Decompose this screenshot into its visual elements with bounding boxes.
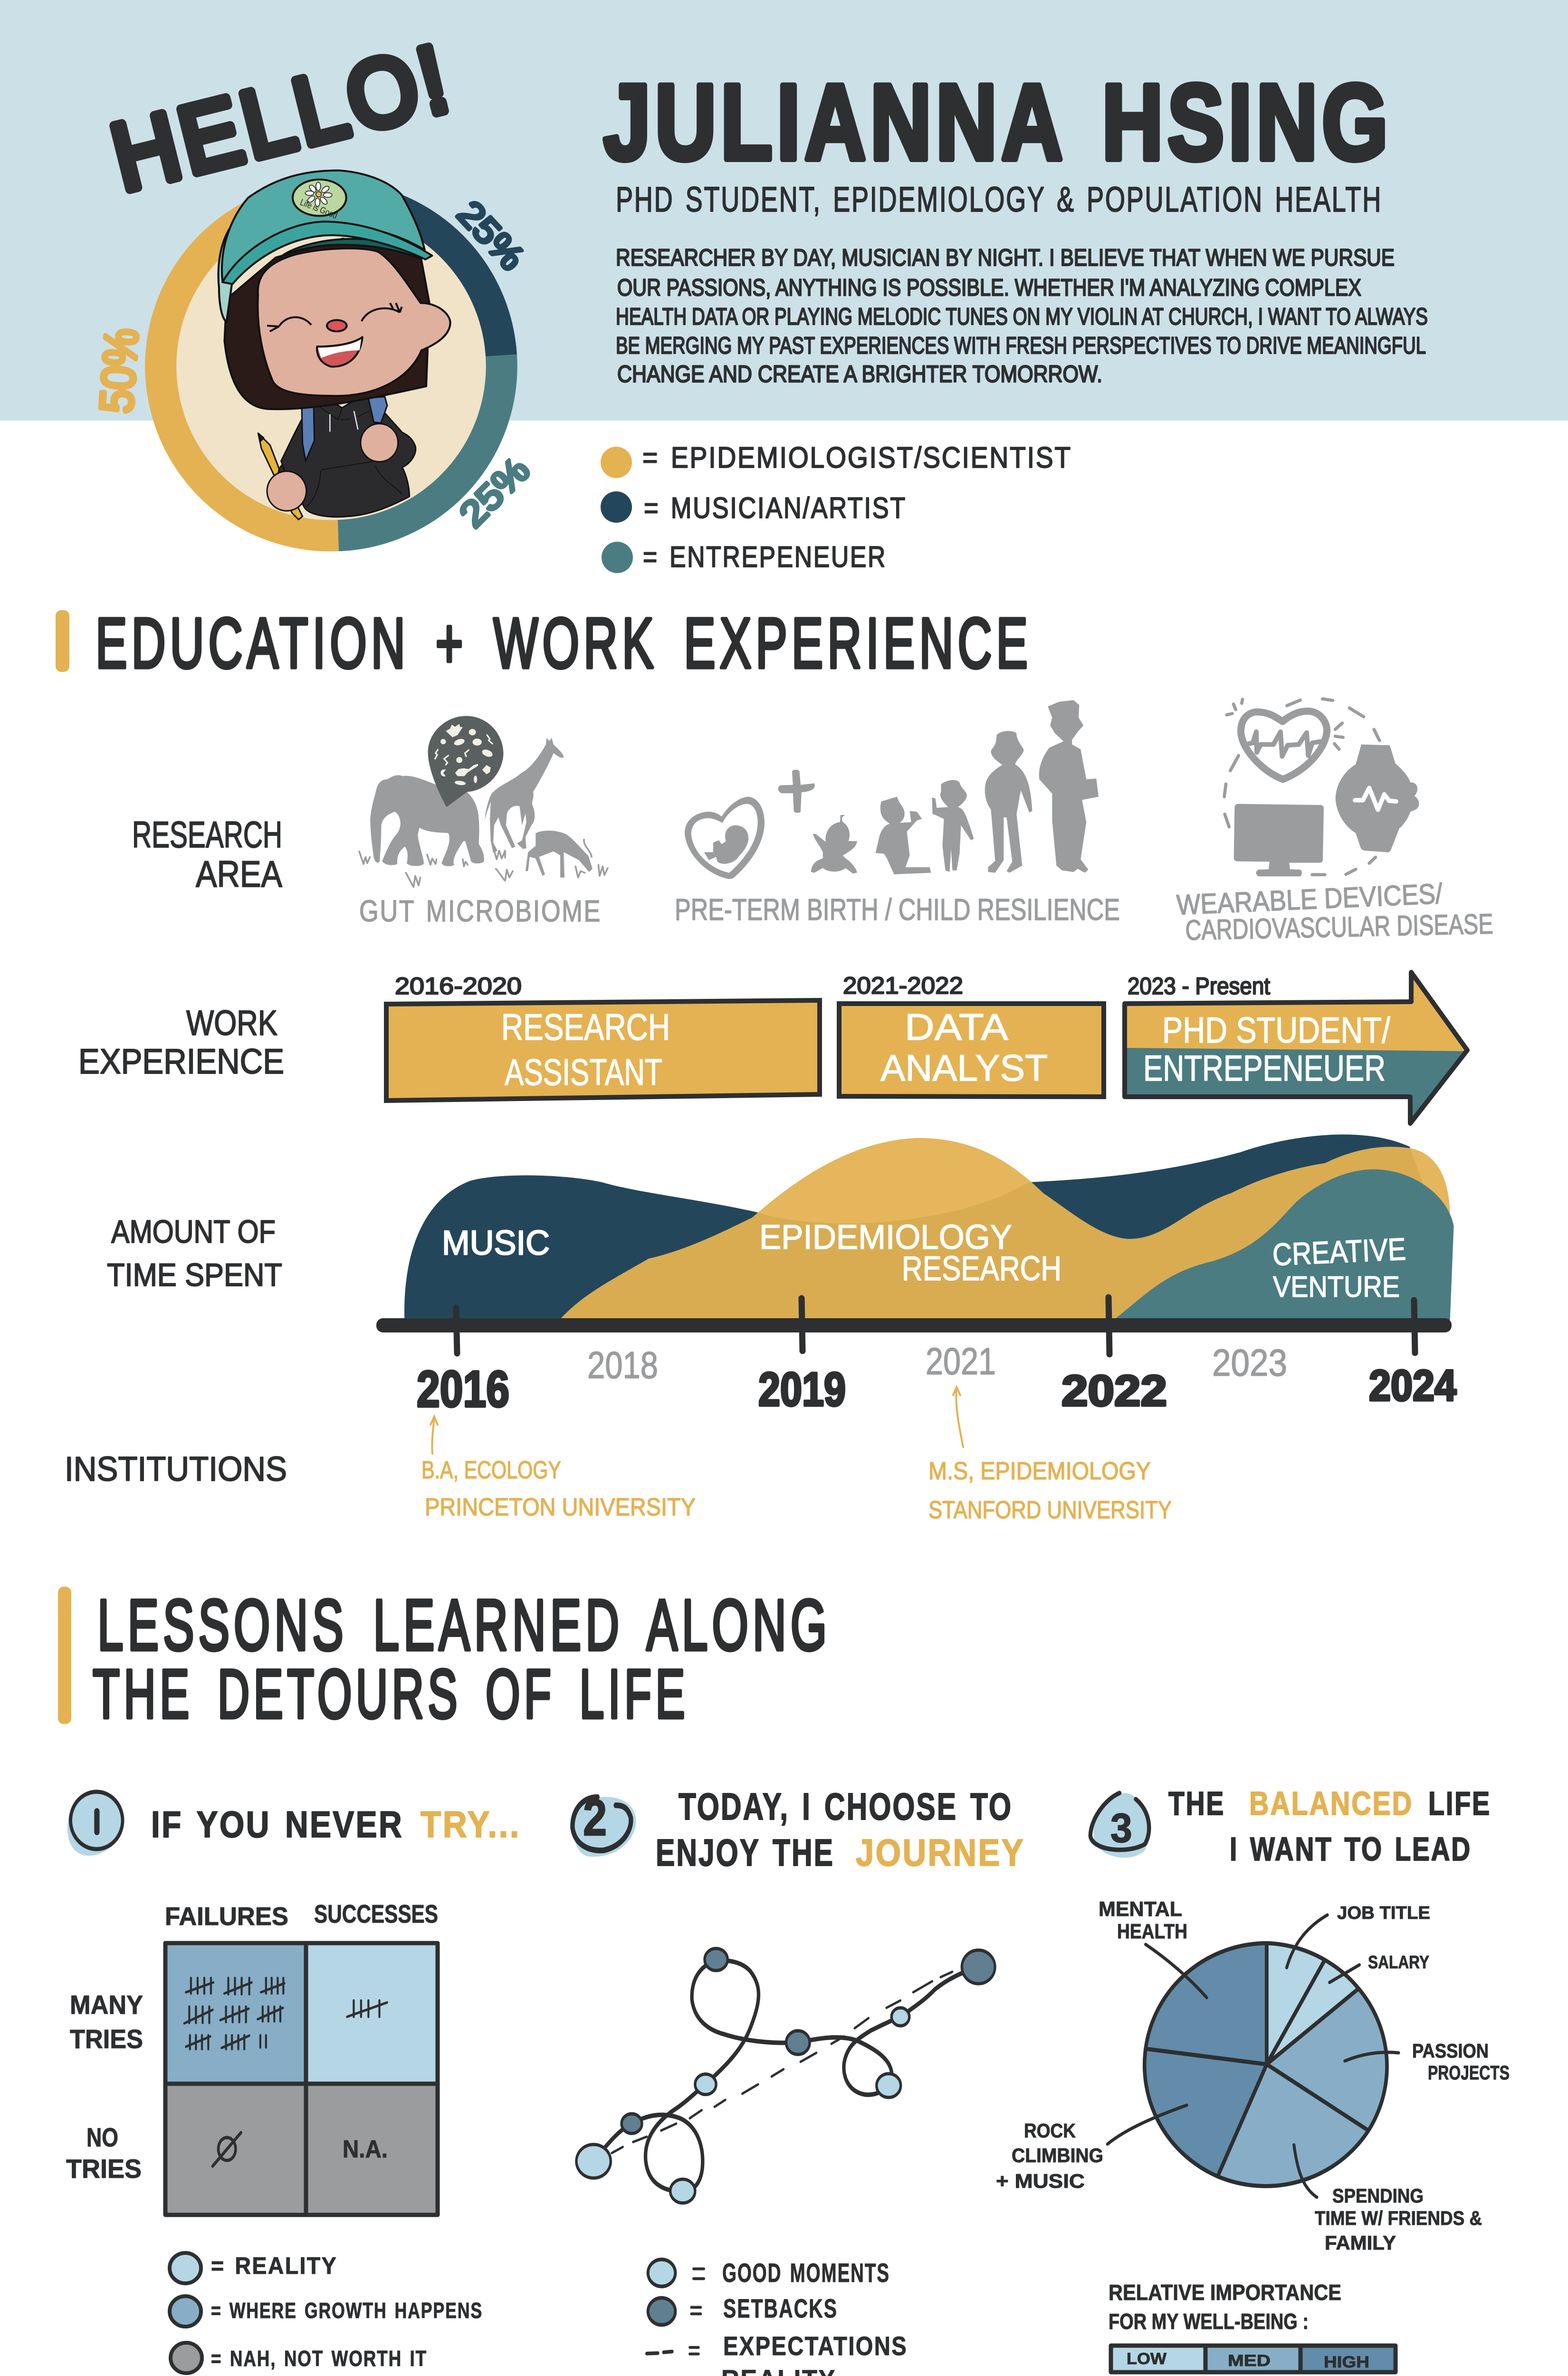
box text: data analyst: ANALYST — [880, 1047, 1048, 1089]
area: creative venture — [1114, 1169, 1454, 1320]
n.a.: N.A. — [343, 2136, 388, 2163]
adult two — [1039, 700, 1099, 873]
row label: amount of time spent: TIME SPENT — [107, 1257, 282, 1293]
elephant — [370, 775, 484, 866]
institution: princeton: PRINCETON UNIVERSITY — [425, 1494, 696, 1521]
row label: work experience: WORK — [186, 1003, 277, 1043]
reality path — [593, 1960, 978, 2191]
heading accent bar — [56, 610, 69, 672]
row labels: NO — [86, 2122, 118, 2152]
percent label: 50% epidemiologist: 50% — [90, 326, 148, 415]
tally marks — [184, 1978, 387, 2049]
year labels: 2021 — [926, 1340, 996, 1382]
adult one — [985, 731, 1032, 873]
heading text: LESSONS LEARNED ALONG — [97, 1585, 831, 1666]
lesson 1 heading: IF YOU NEVER — [151, 1803, 403, 1845]
column labels — [165, 1900, 438, 1931]
row label: amount of time spent: AMOUNT OF — [111, 1214, 276, 1250]
panel: lesson 2 enjoy the journey — [573, 1785, 1025, 2376]
row labels — [66, 1990, 143, 2184]
label: wearable devices and cardiovascular disease: WEARABLE DEVICES/ — [1176, 878, 1443, 921]
section heading: education and work experience — [56, 603, 1032, 683]
journey diagram — [576, 1948, 995, 2203]
chart label: epidemiology research: EPIDEMIOLOGY — [759, 1218, 1012, 1256]
lesson 2 heading: JOURNEY — [856, 1831, 1025, 1874]
year labels: 2018 — [587, 1344, 658, 1386]
column labels: SUCCESSES — [314, 1900, 438, 1928]
cap flower — [305, 182, 332, 206]
panel: lesson 1 if you never try — [66, 1792, 521, 2373]
box text: data analyst — [880, 1006, 1048, 1089]
face — [258, 249, 450, 396]
pie labels — [996, 1897, 1510, 2254]
legend label: reality: = REALITY — [211, 2252, 337, 2279]
lesson 3 heading — [1168, 1785, 1491, 1868]
box: research assistant — [386, 1000, 820, 1101]
pencil tip — [258, 433, 264, 441]
cap patch — [293, 180, 346, 216]
microbes — [435, 724, 494, 786]
hair — [225, 239, 430, 409]
importance scale heading: FOR MY WELL-BEING : — [1109, 2309, 1309, 2334]
monitor — [1234, 804, 1324, 876]
pie labels: PROJECTS — [1428, 2061, 1510, 2084]
pie labels: HEALTH — [1117, 1920, 1187, 1943]
year labels — [417, 1340, 1456, 1418]
box: data analyst — [839, 1004, 1104, 1097]
importance scale bar: MED — [1228, 2352, 1271, 2370]
number badge 3: 3 — [1110, 1805, 1132, 1851]
box text: research assistant — [501, 1006, 670, 1093]
bio paragraph: CHANGE AND CREATE A BRIGHTER TOMORROW. — [617, 361, 1102, 387]
hoodie strings — [330, 411, 358, 431]
watch pulse — [1355, 788, 1396, 810]
pie labels: SALARY — [1368, 1953, 1429, 1973]
row label: work experience: EXPERIENCE — [78, 1042, 284, 1081]
timeline ticks — [456, 1297, 1415, 1354]
slice: friends and family — [1218, 2064, 1368, 2186]
year labels: 2016 — [417, 1360, 509, 1418]
pie chart — [1108, 1915, 1399, 2197]
pie labels: SPENDING — [1332, 2184, 1424, 2207]
number badge 2 — [573, 1790, 636, 1857]
legend label: setbacks: SETBACKS — [723, 2293, 838, 2323]
pie labels: CLIMBING — [1012, 2144, 1103, 2166]
legend dot: not worth it — [171, 2343, 202, 2373]
right hand — [361, 424, 398, 462]
pie labels: TIME W/ FRIENDS & — [1315, 2207, 1482, 2229]
year labels: 2024 — [1369, 1361, 1456, 1410]
fetus — [704, 825, 748, 864]
number badge 1 — [67, 1792, 123, 1856]
box text: data analyst: DATA — [905, 1006, 1008, 1048]
lesson 2 heading: ENJOY THE — [656, 1831, 834, 1874]
donut segment: entrepreneur 25% — [338, 355, 502, 536]
slice: rock climbing and music — [1145, 2049, 1267, 2176]
box text: research assistant: ASSISTANT — [505, 1051, 662, 1093]
header background band — [0, 0, 1568, 421]
lesson 2 heading — [656, 1785, 1025, 1874]
teeth — [318, 339, 361, 358]
row labels: MANY — [70, 1990, 143, 2020]
row label: research area: AREA — [196, 853, 282, 895]
section heading: lessons learned — [58, 1585, 831, 1733]
lesson 3 heading: BALANCED — [1249, 1785, 1413, 1822]
arrow text — [1143, 1010, 1391, 1089]
milestone circles — [576, 1948, 995, 2203]
legend dot: musician — [601, 491, 632, 523]
antelope — [526, 831, 593, 878]
row labels: TRIES — [66, 2154, 142, 2184]
microbiome pin — [428, 716, 504, 807]
year labels: 2022 — [1061, 1367, 1167, 1415]
institution: stanford: STANFORD UNIVERSITY — [928, 1496, 1172, 1524]
importance scale heading: RELATIVE IMPORTANCE — [1109, 2280, 1341, 2305]
chart label: epidemiology research: RESEARCH — [902, 1250, 1061, 1288]
label: wearable devices and cardiovascular disease: CARDIOVASCULAR DISEASE — [1185, 908, 1493, 946]
cap patch text: Life is Good — [298, 197, 339, 221]
left hand — [267, 471, 306, 511]
lesson 2 heading: TODAY, I CHOOSE TO — [679, 1785, 1013, 1828]
watch — [1336, 745, 1419, 853]
chart label: creative venture — [1272, 1231, 1406, 1303]
chart label: epidemiology research — [759, 1218, 1061, 1288]
donut cream centre — [172, 207, 491, 525]
grass and horn — [359, 840, 608, 887]
chart label: creative venture: CREATIVE — [1272, 1231, 1406, 1272]
row label: research area: RESEARCH — [132, 814, 282, 855]
legend label: good moments: GOOD MOMENTS — [722, 2258, 890, 2288]
legend dot: growth — [170, 2296, 201, 2327]
chart label: creative venture: VENTURE — [1273, 1271, 1400, 1303]
baby — [811, 815, 857, 873]
timeline axis — [376, 1318, 1452, 1332]
heading: hello: HELLO! — [102, 25, 462, 211]
date: 2016-2020: 2016-2020 — [395, 973, 522, 999]
importance scale bar: HIGH — [1324, 2353, 1369, 2371]
arrow: stanford — [953, 1387, 963, 1447]
legend label: epidemiologist: = EPIDEMIOLOGIST/SCIENTIST — [642, 441, 1072, 474]
bio paragraph: RESEARCHER BY DAY, MUSICIAN BY NIGHT. I BELIEVE THAT WHEN WE PURSUE — [616, 244, 1395, 271]
arrow text: PHD STUDENT/ — [1162, 1010, 1391, 1051]
icon: wearable devices and heart — [1224, 699, 1419, 876]
percent label: 25% musician: 25% — [449, 193, 532, 278]
institution: princeton: B.A, ECOLOGY — [421, 1456, 561, 1484]
nose — [327, 320, 347, 331]
dashed arc — [1224, 699, 1379, 875]
icon: pre-term birth and child resilience — [685, 700, 1099, 879]
heartbeat line — [1249, 732, 1322, 757]
importance scale bar — [1111, 2346, 1396, 2372]
arrow: phd student and entrepreneur — [1124, 972, 1467, 1123]
column labels: FAILURES — [165, 1902, 288, 1931]
leader lines — [1108, 1915, 1399, 2197]
slice: passion projects — [1267, 1989, 1387, 2131]
section heading: lessons learned: THE DETOURS OF LIFE — [93, 1655, 689, 1733]
lesson 2 legend — [647, 2258, 908, 2376]
backpack straps — [302, 397, 387, 461]
legend label: growth: = WHERE GROWTH HAPPENS — [211, 2298, 483, 2323]
label: wearable devices and cardiovascular disease — [1176, 878, 1493, 946]
role donut chart with avatar — [90, 171, 537, 536]
arrow: princeton — [430, 1417, 438, 1454]
date: 2021-2022: 2021-2022 — [843, 972, 963, 999]
institution: stanford: M.S, EPIDEMIOLOGY — [928, 1457, 1151, 1485]
cap brim — [222, 221, 432, 284]
hoodie sleeve — [278, 460, 307, 487]
label: pre-term birth and child resilience: PRE-TERM BIRTH / CHILD RESILIENCE — [675, 892, 1120, 927]
number badge 2: 2 — [583, 1790, 607, 1846]
legend label: musician: = MUSICIAN/ARTIST — [644, 492, 907, 525]
area: epidemiology — [559, 1138, 1450, 1320]
heart outline — [1241, 711, 1327, 779]
lesson 1 heading: TRY... — [421, 1803, 521, 1845]
panel: lesson 3 balanced life — [996, 1785, 1510, 2372]
avatar head with cap — [219, 171, 450, 409]
area: music — [404, 1134, 1428, 1320]
row labels: TRIES — [70, 2024, 143, 2054]
pie labels: JOB TITLE — [1337, 1903, 1430, 1923]
pie labels: FAMILY — [1325, 2232, 1396, 2254]
toddler — [876, 797, 931, 874]
row label: amount of time spent — [107, 1214, 282, 1293]
lesson 3 heading: LIFE — [1428, 1785, 1491, 1822]
legend label: expectations: EXPECTATIONS — [723, 2331, 908, 2361]
pie labels: PASSION — [1412, 2040, 1489, 2062]
cap side panel — [219, 227, 232, 322]
pie labels: + MUSIC — [996, 2170, 1085, 2192]
row label: research area — [132, 814, 282, 895]
row label: work experience — [78, 1003, 284, 1081]
legend dot: reality — [170, 2253, 201, 2283]
date: 2023-present: 2023 - Present — [1128, 973, 1270, 999]
arrow text: ENTREPENEUER — [1143, 1048, 1386, 1089]
role legend — [601, 441, 1072, 574]
bio paragraph: OUR PASSIONS, ANYTHING IS POSSIBLE. WHETHER I'M ANALYZING COMPLEX — [617, 274, 1361, 301]
lesson 3 heading: I WANT TO LEAD — [1230, 1830, 1472, 1868]
institution: princeton — [421, 1456, 696, 1521]
percent label: 25% entrepreneur: 25% — [452, 450, 537, 535]
pencil — [258, 433, 303, 519]
legend dot: entrepreneur — [602, 542, 633, 573]
avatar body with hoodie — [258, 396, 416, 519]
slice: salary — [1267, 1960, 1358, 2064]
institution: stanford — [928, 1457, 1172, 1524]
lesson 3 heading: THE — [1168, 1785, 1225, 1822]
donut segment: epidemiologist 50% — [161, 209, 338, 536]
importance scale heading — [1109, 2280, 1341, 2334]
row label: institutions: INSTITUTIONS — [65, 1450, 287, 1488]
area chart: time spent — [376, 1134, 1456, 1454]
legend label: entrepreneur: = ENTREPENEUER — [643, 541, 887, 574]
matrix — [165, 1943, 438, 2215]
empty-set symbol — [212, 2133, 241, 2166]
label: gut microbiome: GUT MICROBIOME — [359, 894, 602, 928]
bio paragraph — [616, 244, 1428, 387]
icon: gut microbiome animals — [359, 716, 608, 887]
pie labels: ROCK — [1024, 2119, 1076, 2142]
year labels: 2023 — [1212, 1341, 1287, 1384]
cap under-brim — [280, 239, 421, 258]
heading accent bar — [58, 1587, 71, 1724]
lesson 1 legend — [170, 2252, 483, 2373]
legend label: not worth it: = NAH, NOT WORTH IT — [211, 2346, 427, 2371]
giraffe — [485, 738, 564, 853]
pie labels: MENTAL — [1099, 1897, 1182, 1921]
legend dot: epidemiologist — [601, 447, 632, 478]
chart label: music: MUSIC — [442, 1224, 550, 1262]
year labels: 2019 — [758, 1363, 846, 1416]
plus sign — [778, 770, 815, 813]
number badge 3 — [1090, 1793, 1149, 1858]
cap crown — [222, 171, 425, 282]
box text: research assistant: RESEARCH — [501, 1006, 670, 1048]
mouth — [317, 337, 363, 367]
slice: mental health — [1146, 1943, 1267, 2064]
heading text: EDUCATION + WORK EXPERIENCE — [96, 603, 1032, 683]
importance scale bar: LOW — [1127, 2350, 1167, 2368]
work timeline boxes — [386, 972, 1467, 1123]
slice: job title — [1267, 1943, 1325, 2064]
hoodie — [281, 396, 416, 517]
hoodie seams — [306, 404, 402, 507]
legend symbols — [647, 2260, 704, 2376]
donut segment: musician 25% — [394, 209, 501, 355]
child — [932, 780, 974, 872]
expectation dashes — [612, 1972, 952, 2153]
heart outline — [685, 797, 765, 879]
eyes — [267, 303, 402, 331]
